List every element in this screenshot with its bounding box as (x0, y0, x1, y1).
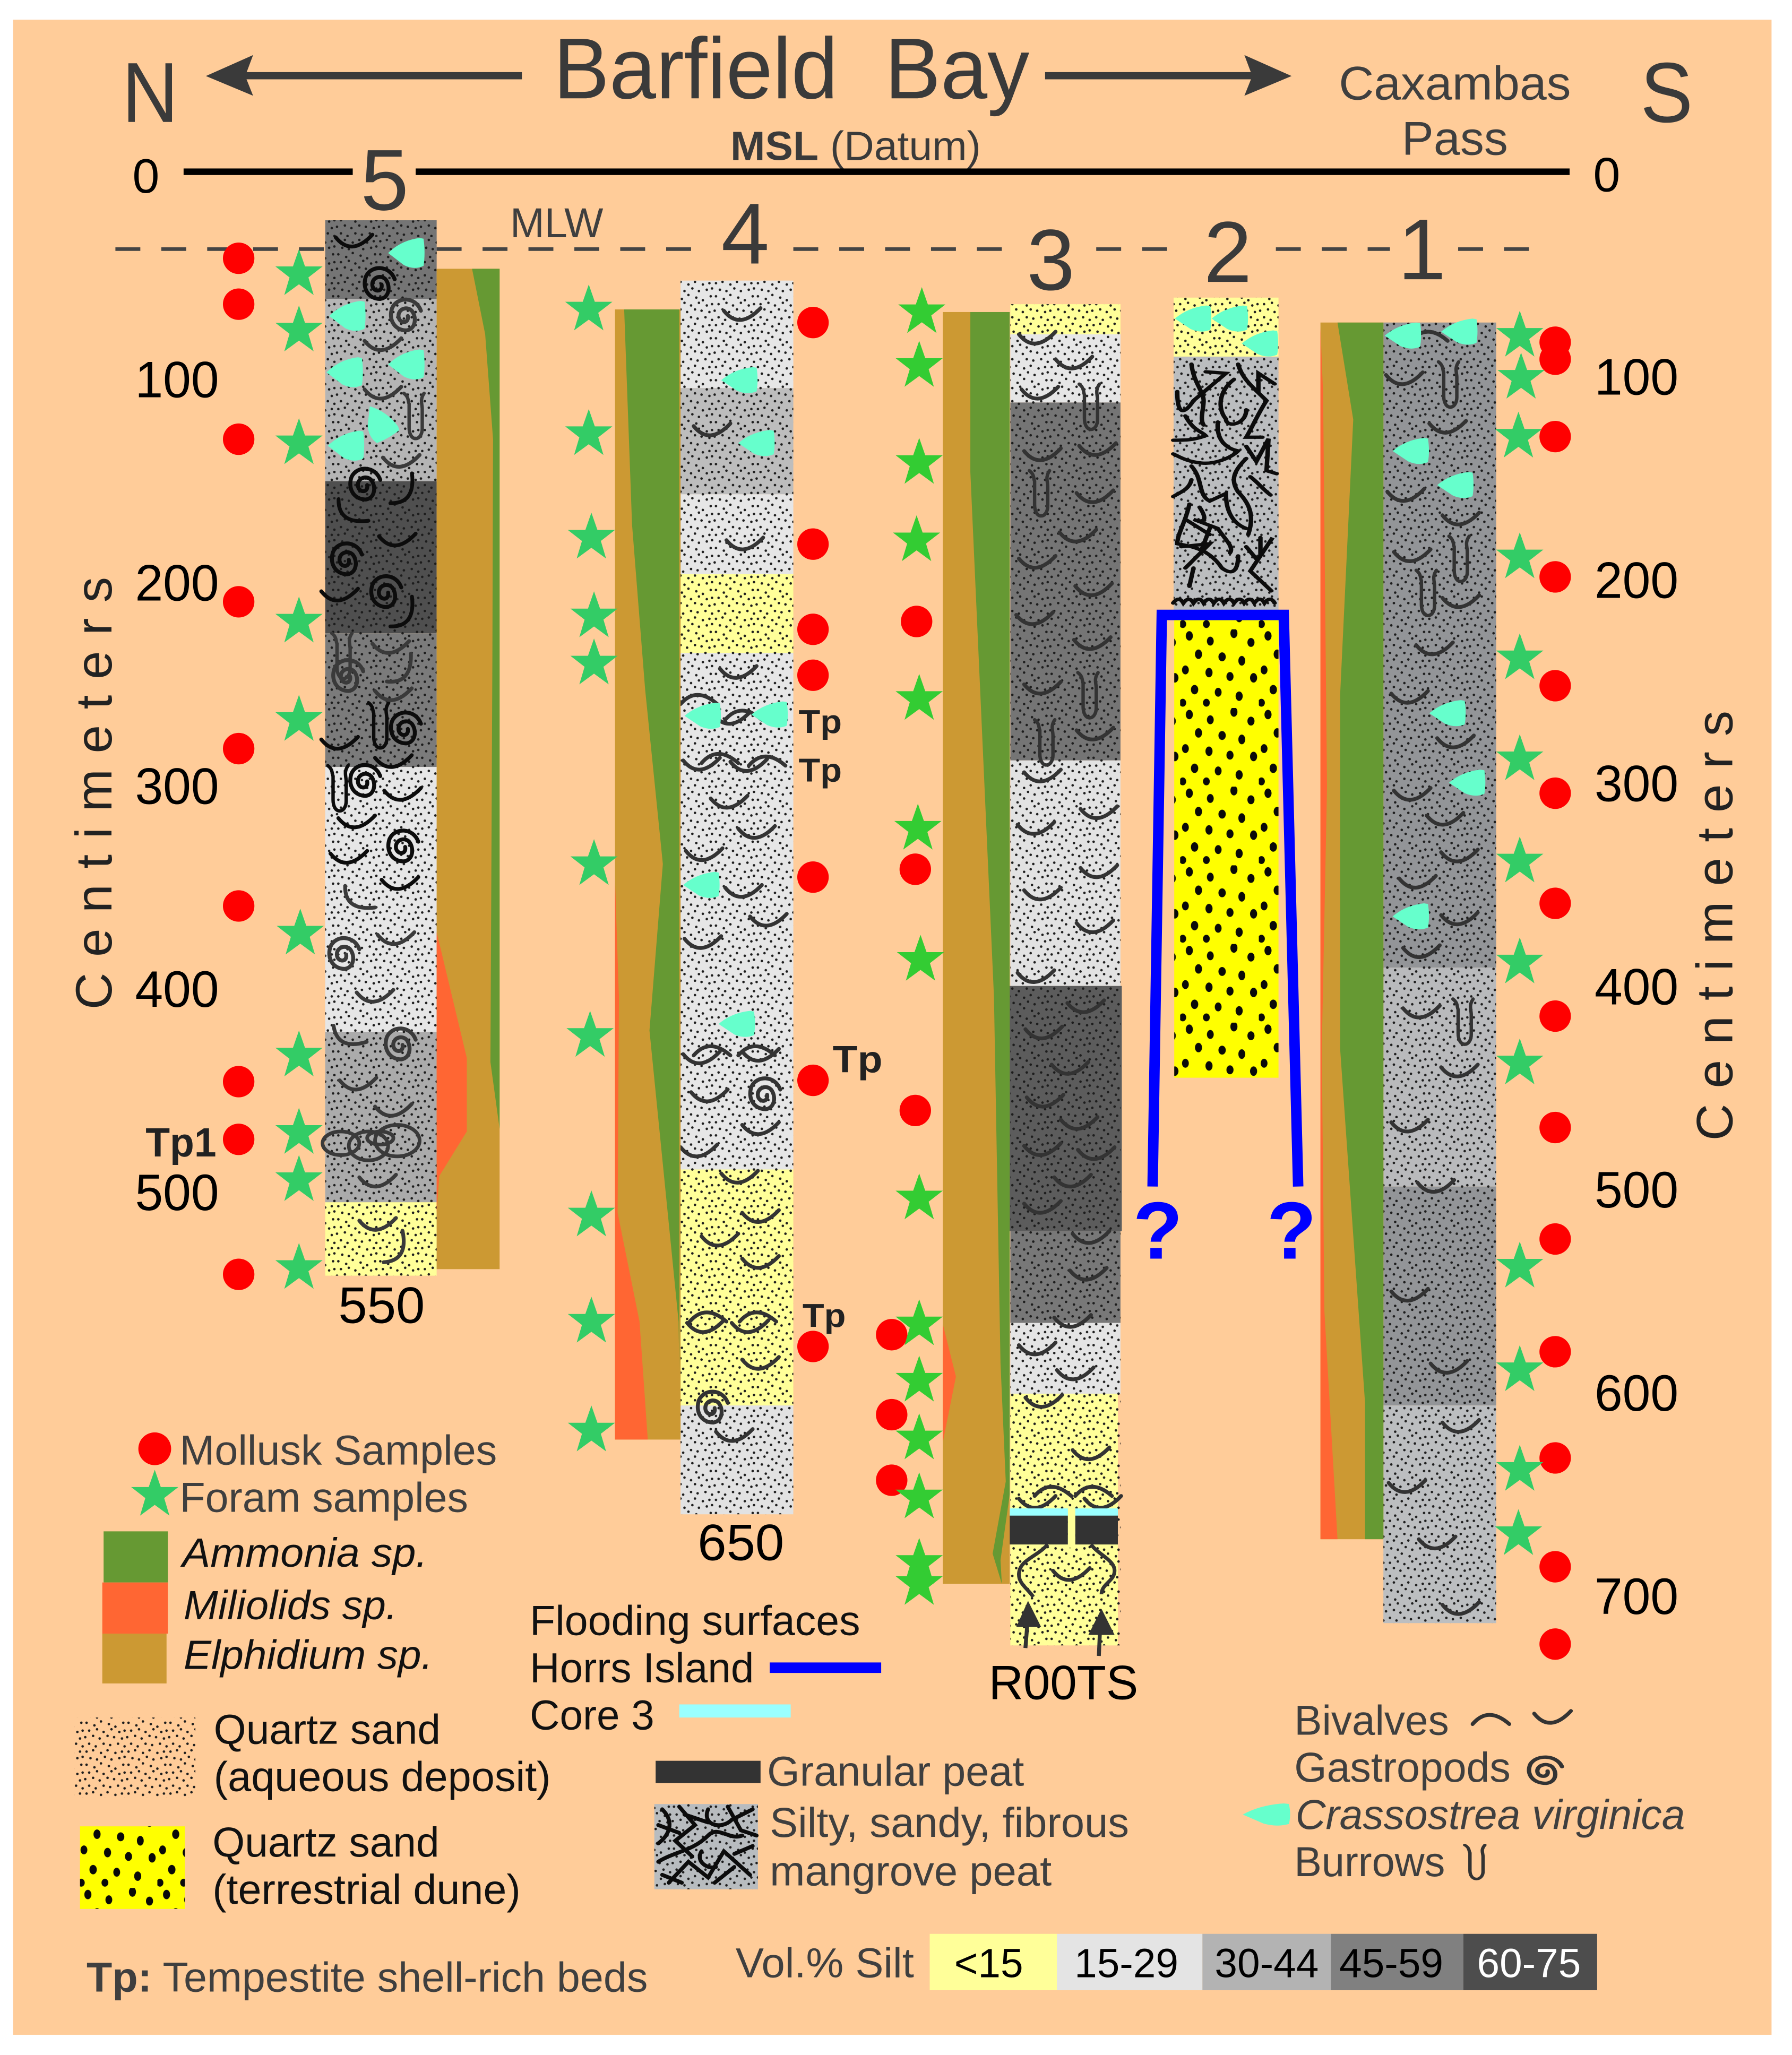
left depth axis: 500 (135, 1164, 219, 1221)
label: Caxambas Pass: Caxambas (1339, 57, 1571, 110)
legend: fossil symbols: Crassostrea virginica (1296, 1791, 1685, 1838)
Tp labels core 4: Tp (798, 752, 842, 789)
arrow: pointing north (206, 55, 522, 96)
right depth axis: 200 (1595, 552, 1678, 609)
title: Barfield Bay: Barfield Bay (554, 20, 1030, 117)
label: ROOTS: R00TS (989, 1656, 1138, 1710)
label: Caxambas Pass: Pass (1402, 111, 1508, 165)
legend: volume percent silt scale: 45-59 (1339, 1941, 1443, 1986)
legend: fossil symbols: Bivalves (1294, 1696, 1449, 1743)
legend: flooding surfaces: Flooding surfaces (530, 1597, 860, 1644)
legend: quartz sand aqueous: Quartz sand (214, 1706, 441, 1753)
legend: sample markers (131, 1426, 497, 1521)
legend: flooding surfaces: Core 3 (530, 1691, 654, 1738)
MLW dashed line (115, 248, 1538, 250)
arrow: pointing south (1045, 55, 1291, 96)
label: MSL datum: MSL (Datum) (730, 124, 981, 169)
legend: volume percent silt scale: 15-29 (1074, 1941, 1178, 1986)
question marks: ? (1133, 1186, 1183, 1276)
Tp labels core 4: Tp (803, 1298, 846, 1334)
legend: volume percent silt scale: Vol.% Silt (736, 1939, 914, 1986)
legend: sample markers: Foram samples (179, 1473, 468, 1521)
legend: sample markers: Mollusk Samples (179, 1426, 497, 1473)
legend: volume percent silt scale (736, 1934, 1597, 1990)
Tp labels core 4 (798, 704, 883, 1334)
left depth axis: 300 (135, 758, 219, 815)
label: Caxambas Pass (1339, 57, 1571, 165)
core number 3: 3 (1027, 211, 1075, 308)
right depth axis: 0 (1593, 148, 1620, 202)
legend: mangrove peat (654, 1799, 1129, 1894)
right depth axis (1593, 148, 1678, 1625)
foram chart core 4 (615, 309, 680, 1439)
legend: foram species: Ammonia sp. (180, 1531, 427, 1576)
arrows: roots (1016, 1601, 1115, 1656)
core 5 depth label: 550 (338, 1277, 425, 1334)
legend: quartz sand aqueous: (aqueous deposit) (214, 1752, 551, 1800)
left depth axis: 400 (135, 961, 219, 1018)
right depth axis: 400 (1595, 959, 1678, 1015)
core 5 column (321, 220, 437, 1276)
compass letter N: N (122, 46, 178, 141)
legend: granular peat (656, 1748, 1024, 1795)
label: Tp1: Tp1 (145, 1120, 217, 1165)
legend: quartz sand dune: Quartz sand (212, 1818, 440, 1866)
foram samples core 5 (275, 249, 324, 1289)
legend: flooding surfaces (530, 1597, 881, 1738)
core 2 column (1173, 298, 1279, 1078)
core 4 column (680, 281, 794, 1514)
legend: quartz sand dune (80, 1818, 521, 1913)
core number 5: 5 (360, 131, 409, 228)
foram chart core 1 (1321, 323, 1383, 1539)
legend: fossil symbols (1243, 1696, 1685, 1885)
legend: foram species (102, 1531, 433, 1683)
legend: mangrove peat: Silty, sandy, fibrous (770, 1799, 1129, 1846)
right depth axis: 600 (1595, 1365, 1678, 1422)
Tp labels core 4: Tp (833, 1039, 883, 1081)
foram chart core 5 (437, 269, 499, 1269)
mollusk samples core 1 (1539, 326, 1571, 1660)
foram samples core 4 (565, 284, 618, 1452)
legend: foram species: Miliolids sp. (184, 1583, 398, 1628)
legend: foram species: Elphidium sp. (184, 1633, 433, 1678)
core number 4: 4 (721, 185, 769, 282)
footnote: Tp definition: Tp: Tempestite shell-rich beds (87, 1953, 648, 2000)
core 4 depth label: 650 (697, 1515, 784, 1572)
core number 2: 2 (1204, 203, 1252, 300)
datum line (184, 168, 1570, 175)
right depth axis: 500 (1595, 1162, 1678, 1219)
Horrs Island flooding surface outline (1152, 615, 1298, 1187)
core 3 column (1009, 304, 1122, 1645)
legend: volume percent silt scale: 60-75 (1477, 1941, 1581, 1986)
mollusk samples core 3 (876, 606, 932, 1496)
foram chart core 3 (943, 312, 1010, 1584)
foram samples core 1 (1495, 310, 1545, 1555)
right depth axis: 300 (1595, 755, 1678, 812)
right depth axis: 100 (1595, 349, 1678, 406)
foram samples core 3 (893, 287, 945, 1605)
left depth axis: 200 (135, 555, 219, 611)
question marks (1133, 1186, 1316, 1276)
legend: volume percent silt scale: 30-44 (1214, 1941, 1319, 1986)
legend: fossil symbols: Burrows (1294, 1838, 1445, 1885)
legend: mangrove peat: mangrove peat (770, 1847, 1052, 1894)
compass letter S: S (1640, 46, 1693, 141)
left depth axis: 100 (135, 352, 219, 409)
Tp labels core 4: Tp (798, 704, 842, 740)
legend: flooding surfaces: Horrs Island (530, 1644, 754, 1691)
core 1 column (1383, 318, 1496, 1623)
legend: quartz sand aqueous (75, 1706, 551, 1800)
core number 1: 1 (1398, 201, 1446, 298)
legend: volume percent silt scale: <15 (954, 1941, 1023, 1986)
left depth axis: 0 (133, 149, 159, 203)
legend: fossil symbols: Gastropods (1294, 1743, 1511, 1791)
mollusk samples core 4 (797, 307, 829, 1362)
mollusk samples core 5 (223, 243, 254, 1290)
question marks: ? (1267, 1186, 1316, 1276)
left depth axis (133, 149, 219, 1221)
axis title left: Centimeters: Centimeters (66, 577, 123, 1009)
legend: granular peat: Granular peat (767, 1748, 1024, 1795)
legend: quartz sand dune: (terrestrial dune) (212, 1866, 521, 1913)
label: MLW: MLW (510, 199, 604, 246)
axis title right: Centimeters: Centimeters (1686, 711, 1743, 1141)
right depth axis: 700 (1595, 1568, 1678, 1625)
